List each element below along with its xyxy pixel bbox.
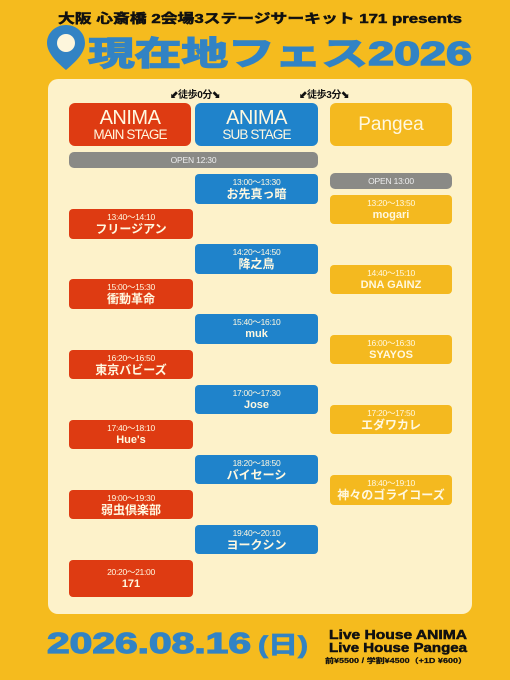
slot: 171: 171 — [122, 578, 140, 590]
slot: 衝動革命: 衝動革命 — [107, 292, 155, 306]
event date: (日) — [258, 632, 308, 659]
title: 現在地フェス2026 — [88, 35, 472, 72]
slot: mogari: mogari — [373, 209, 409, 221]
slot: 降之鳥: 14:20～14:50 — [233, 247, 280, 257]
header: ANIMA sub stage: SUB STAGE — [222, 127, 291, 142]
open bar: ANIMA — [69, 152, 318, 168]
slot: お先真っ暗 — [195, 174, 318, 204]
slot: 弱虫倶楽部: 弱虫倶楽部 — [101, 503, 161, 517]
top tagline: 大阪 心斎橋 2会場3ステージサーキット 171 presents — [58, 11, 462, 26]
slot: 神々のゴライコーズ — [330, 475, 452, 505]
slot: お先真っ暗: 13:00～13:30 — [233, 177, 280, 187]
slot: DNA GAINZ — [330, 265, 452, 294]
slot: 171: 20:20～21:00 — [107, 567, 155, 577]
slot: ヨークシン — [195, 525, 318, 554]
slot: Jose: Jose — [244, 399, 269, 411]
slot: muk: 15:40～16:10 — [233, 317, 280, 327]
icon: map pin — [47, 25, 85, 70]
slot: Jose: 17:00～17:30 — [233, 388, 280, 398]
slot: エダワカレ: 17:20～17:50 — [367, 408, 415, 418]
slot: 衝動革命: 15:00～15:30 — [107, 282, 155, 292]
slot: バイセーシ: バイセーシ — [227, 468, 286, 482]
slot: SYAYOS: 16:00～16:30 — [367, 338, 415, 348]
slot: 東京バビーズ: 東京バビーズ — [95, 363, 167, 377]
header: Pangea — [330, 103, 452, 146]
slot: Jose — [195, 385, 318, 414]
header: Pangea: Pangea — [358, 114, 424, 135]
slot: ヨークシン: 19:40～20:10 — [233, 528, 280, 538]
slot: mogari: 13:20～13:50 — [367, 198, 415, 208]
slot: mogari — [330, 195, 452, 224]
slot: バイセーシ — [195, 455, 318, 484]
slot: Hue's: Hue's — [116, 434, 146, 446]
slot: SYAYOS — [330, 335, 452, 364]
slot: エダワカレ — [330, 405, 452, 434]
event date: 2026.08.16 — [47, 628, 251, 660]
slot: DNA GAINZ: DNA GAINZ — [361, 279, 421, 291]
slot: フリージアン: フリージアン — [95, 222, 167, 236]
open bar: Pangea: OPEN 13:00 — [368, 176, 414, 186]
walking note: 0 minutes: ⬋徒歩0分⬊ — [170, 90, 220, 101]
slot: 171 — [69, 560, 193, 597]
slot: 弱虫倶楽部 — [69, 490, 193, 519]
slot: 降之鳥: 降之鳥 — [238, 257, 274, 271]
slot: フリージアン — [69, 209, 193, 239]
slot: 東京バビーズ: 16:20～16:50 — [107, 353, 155, 363]
slot: バイセーシ: 18:20～18:50 — [233, 458, 280, 468]
panel: timetable — [48, 79, 472, 614]
slot: muk: muk — [245, 328, 268, 340]
slot: フリージアン: 13:40～14:10 — [107, 212, 155, 222]
header: ANIMA main stage: ANIMA — [100, 107, 160, 129]
event date — [47, 628, 308, 660]
open bar: ANIMA: OPEN 12:30 — [171, 155, 216, 165]
header: ANIMA sub stage — [195, 103, 318, 146]
venue and ticket info: Live House ANIMA — [329, 628, 467, 642]
slot: DNA GAINZ: 14:40～15:10 — [367, 268, 415, 278]
slot: 神々のゴライコーズ: 18:40～19:10 — [367, 478, 415, 488]
walking note: 3 minutes: ⬋徒歩3分⬊ — [299, 90, 349, 101]
header: ANIMA main stage — [69, 103, 191, 146]
venue and ticket info: 前¥5500 / 学割¥4500（+1D ¥600） — [325, 656, 467, 665]
slot: 衝動革命 — [69, 279, 193, 309]
slot: 東京バビーズ — [69, 350, 193, 379]
slot: muk — [195, 314, 318, 344]
header: ANIMA main stage: MAIN STAGE — [93, 127, 167, 142]
slot: 神々のゴライコーズ: 神々のゴライコーズ — [337, 488, 445, 502]
slot: 降之鳥 — [195, 244, 318, 274]
slot: SYAYOS: SYAYOS — [369, 349, 413, 361]
slot: ヨークシン: ヨークシン — [226, 538, 286, 552]
header: ANIMA sub stage: ANIMA — [226, 107, 287, 129]
slot: Hue's: 17:40～18:10 — [107, 423, 155, 433]
slot: Hue's — [69, 420, 193, 449]
venue and ticket info: Live House Pangea — [329, 641, 468, 655]
slot: お先真っ暗: お先真っ暗 — [226, 187, 286, 201]
open bar: Pangea — [330, 173, 452, 189]
slot: 弱虫倶楽部: 19:00～19:30 — [107, 493, 155, 503]
slot: エダワカレ: エダワカレ — [361, 418, 421, 432]
